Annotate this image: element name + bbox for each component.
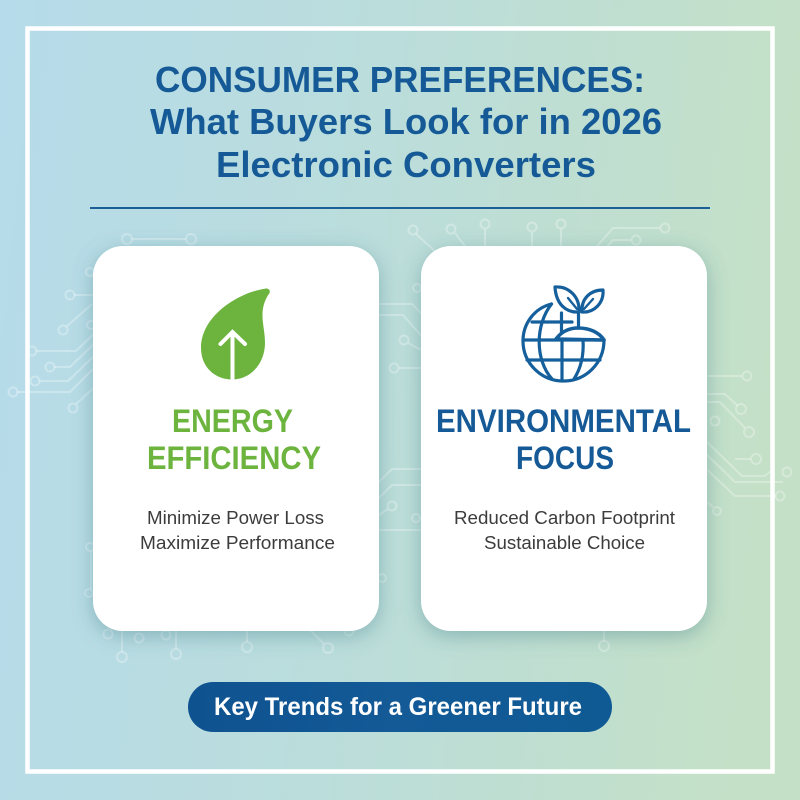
callout: key trends	[188, 682, 612, 732]
heading: environmental focus	[436, 403, 691, 476]
title	[150, 59, 662, 185]
text: energy efficiency description: Minimize Power Loss	[147, 508, 324, 528]
text: environmental focus description	[454, 508, 675, 553]
heading: energy efficiency	[147, 403, 321, 476]
panel: energy efficiency	[93, 246, 379, 631]
callout: key trends: Key Trends for a Greener Future	[214, 693, 582, 721]
icon: leaf with up arrow	[201, 288, 270, 380]
text: environmental focus description: Reduced Carbon Footprint	[454, 508, 675, 528]
title: What Buyers Look for in 2026	[150, 101, 662, 142]
text: environmental focus description: Sustainable Choice	[484, 533, 645, 553]
card background	[421, 246, 707, 631]
heading: environmental focus: FOCUS	[516, 440, 614, 476]
heading: energy efficiency: ENERGY	[172, 403, 293, 439]
text: energy efficiency description: Maximize Performance	[140, 533, 335, 553]
heading: energy efficiency: EFFICIENCY	[147, 440, 321, 476]
card background	[93, 246, 379, 631]
title: Electronic Converters	[216, 144, 596, 185]
icon: globe with sprout	[523, 287, 604, 381]
heading: environmental focus: ENVIRONMENTAL	[436, 403, 691, 439]
text: energy efficiency description	[140, 508, 335, 553]
circuit pattern	[8, 220, 792, 662]
title: CONSUMER PREFERENCES:	[155, 59, 645, 100]
title divider	[90, 207, 710, 209]
panel: environmental focus	[421, 246, 707, 631]
